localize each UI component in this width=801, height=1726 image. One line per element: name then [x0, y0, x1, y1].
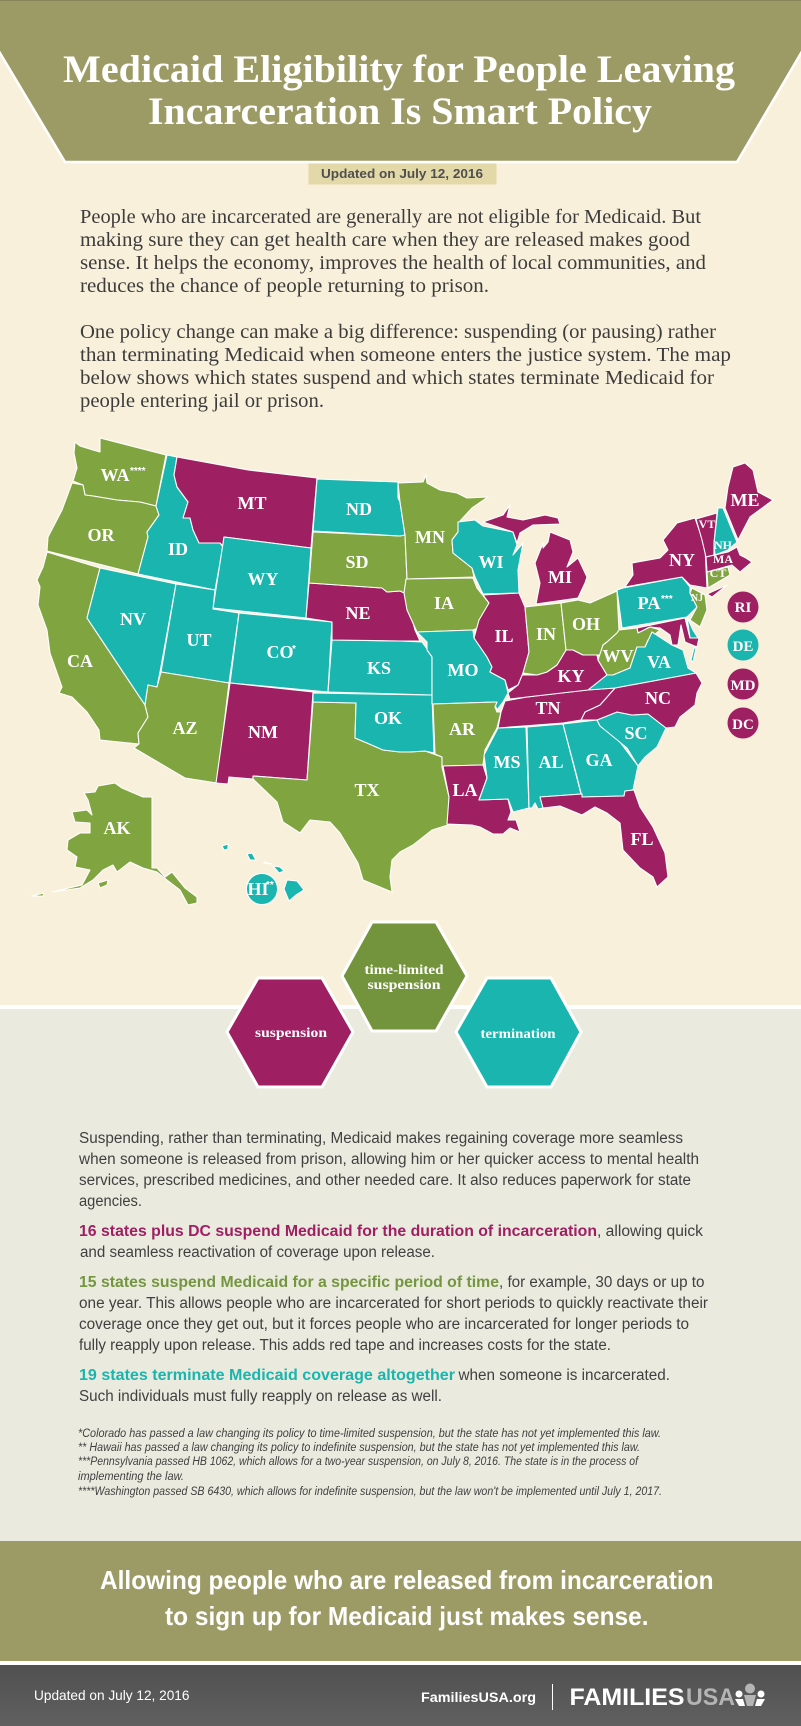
state: PA: *** [661, 594, 673, 605]
state: NE: NE [345, 603, 371, 623]
footnotes: implementing the law. [78, 1471, 184, 1483]
small-state circle: MD [728, 668, 758, 700]
state: MO: MO [448, 660, 478, 680]
state: GA [563, 720, 638, 797]
state: LA: LA [452, 780, 478, 800]
state: IN [523, 603, 566, 675]
state: IA: IA [434, 593, 454, 613]
Families USA logo: FAMILIES [570, 1684, 684, 1711]
finding: states that suspend: and seamless reactivation of coverage upon release. [80, 1244, 435, 1261]
finding: states that suspend [79, 1223, 703, 1261]
state: CT: CT [710, 566, 726, 580]
state: AZ: AZ [172, 718, 198, 738]
title: Medicaid Eligibility for People Leaving [63, 48, 736, 91]
intro paragraph 2: than terminating Medicaid when someone enters the justice system. The map [80, 345, 731, 366]
state: MS [479, 727, 529, 812]
page background: cream upper section [0, 0, 801, 1007]
state: NM [216, 683, 313, 784]
state: NJ [690, 588, 707, 627]
title [63, 48, 736, 133]
footnotes: *Colorado has passed a law changing its policy to time-limited suspension, but the state has not yet implemented this law. [78, 1428, 661, 1440]
state: KY [508, 650, 607, 699]
finding: time-limited suspension: , for example, 30 days or up to [499, 1274, 704, 1291]
state: IL: IL [494, 626, 514, 646]
state: MO [417, 630, 508, 710]
state: VT: VT [699, 517, 715, 531]
legend hexagon: time-limited suspension: time-limited [364, 963, 444, 978]
state: PA: PA [638, 593, 660, 613]
state: WY [213, 537, 311, 618]
state: SD [309, 532, 407, 593]
small-state circle: DE: DE [733, 639, 753, 655]
header banner with title [0, 0, 801, 162]
state: SC: SC [624, 723, 648, 743]
explanatory paragraph: agencies. [79, 1193, 142, 1210]
state: OH [561, 591, 619, 655]
small-state circle: DC: DC [732, 717, 754, 733]
state: WY: WY [248, 569, 278, 589]
intro paragraph 1: sense. It helps the economy, improves the health of local communities, and [80, 253, 706, 274]
small-state circle: MD: MD [730, 678, 756, 694]
state: AK: AK [104, 818, 130, 838]
state: AK [32, 783, 197, 905]
small-state circle: RI: RI [735, 600, 751, 616]
page background: grey lower section [0, 1005, 801, 1545]
state: WA: **** [130, 466, 146, 477]
state: GA: GA [586, 750, 613, 770]
state: NY [625, 518, 727, 597]
footnotes: ***Pennsylvania passed HB 1062, which allows for a two-year suspension, on July 8, 2016. The state is in the process of [78, 1456, 640, 1468]
state: ID: ID [168, 539, 188, 559]
legend hexagon: suspension [227, 978, 353, 1087]
state: AL [527, 724, 581, 809]
finding: time-limited suspension: 15 states suspend Medicaid for a specific period of time [79, 1274, 499, 1291]
state: WV: WV [602, 646, 634, 666]
state: SC [597, 712, 666, 766]
intro paragraph 2 [80, 322, 731, 412]
explanatory paragraph [78, 1130, 699, 1210]
state: ID [138, 455, 223, 590]
explanatory paragraph: Suspending, rather than terminating, Medicaid makes regaining coverage more seamless [79, 1130, 683, 1147]
state: MA and RI [706, 547, 752, 572]
legend hexagon: time-limited suspension: suspension [368, 978, 441, 993]
legend hexagon: time-limited suspension [342, 922, 467, 1031]
explanatory paragraph: when someone is released from prison, allowing him or her quicker access to mental health [78, 1151, 699, 1168]
finding: states that suspend: 16 states plus DC suspend Medicaid for the duration of incarceration [79, 1223, 597, 1240]
footer bar [0, 1665, 801, 1726]
state: MT: MT [238, 493, 266, 513]
state: WA: WA [100, 465, 130, 485]
conclusion band: Allowing people who are released from incarceration [100, 1565, 714, 1595]
state: MI [483, 505, 587, 604]
state: TX [253, 702, 449, 892]
finding: states that terminate [79, 1367, 670, 1405]
finding: states that terminate: when someone is incarcerated. [458, 1367, 670, 1384]
state: WV [598, 627, 660, 675]
state: AR: AR [449, 719, 476, 739]
intro paragraph 1: People who are incarcerated are generally are not eligible for Medicaid. But [80, 207, 702, 228]
state: CA: CA [67, 651, 93, 671]
legend hexagon: termination [456, 978, 581, 1087]
state: WI [452, 520, 523, 594]
state: PA [617, 577, 697, 628]
footnotes: ****Washington passed SB 6430, which allows for indefinite suspension, but the law won't be implemented until July 1, 2017. [78, 1486, 662, 1498]
state: NY: NY [669, 550, 695, 570]
state: AR [433, 702, 501, 766]
intro paragraph 1: making sure they can get health care when they are released makes good [80, 230, 690, 251]
finding: states that suspend: , allowing quick [597, 1223, 703, 1240]
small-state circle: RI [728, 592, 758, 622]
conclusion band: to sign up for Medicaid just makes sense. [165, 1601, 648, 1631]
state: ND [313, 479, 405, 536]
state: NC [581, 673, 702, 728]
finding: time-limited suspension: fully reapply upon release. This adds red tape and increases costs for the state. [79, 1337, 611, 1354]
state: AZ [134, 672, 229, 783]
footer date: Updated on July 12, 2016 [34, 1687, 190, 1703]
state: TX: TX [354, 780, 380, 800]
state: NE [306, 583, 420, 641]
state: SD: SD [345, 552, 369, 572]
Families USA logo [570, 1684, 765, 1711]
state: CT [707, 566, 730, 588]
footnotes [78, 1428, 662, 1498]
state: NM: NM [248, 722, 278, 742]
legend hexagon: termination: termination [480, 1027, 556, 1042]
intro paragraph 2: below shows which states suspend and which states terminate Medicaid for [80, 368, 715, 389]
conclusion band [0, 1541, 801, 1665]
title: Incarceration Is Smart Policy [148, 90, 653, 133]
state: MS: MS [494, 752, 520, 772]
Families USA logo: USA [686, 1684, 735, 1711]
finding: time-limited suspension [79, 1274, 708, 1354]
state: OR [47, 483, 159, 574]
finding: time-limited suspension: coverage once they get out, but it forces people who are incarcerated for longer periods to [79, 1316, 689, 1333]
state: CO: * [292, 644, 296, 655]
explanatory paragraph: services, prescribed medicines, and other needed care. It also reduces paperwork for state [79, 1172, 691, 1189]
state: IL [474, 593, 529, 690]
state: FL: FL [630, 829, 654, 849]
finding: states that terminate: Such individuals must fully reapply on release as well. [79, 1388, 442, 1405]
intro paragraph 1 [80, 207, 706, 297]
state: NC: NC [645, 688, 671, 708]
intro paragraph 1: reduces the chance of people returning to prison. [80, 276, 489, 297]
state: MN: MN [415, 527, 445, 547]
state: FL [540, 790, 668, 887]
updated date badge [308, 164, 496, 184]
state: HI: HI [247, 879, 269, 899]
state: KS: KS [367, 658, 391, 678]
state: KY: KY [558, 666, 585, 686]
legend hexagon: suspension: suspension [255, 1026, 327, 1041]
state: ME [725, 463, 773, 540]
state: IN: IN [536, 624, 556, 644]
footnotes: ** Hawaii has passed a law changing its policy to indefinite suspension, but the state has not yet implemented this law. [78, 1442, 640, 1454]
state: NJ: NJ [691, 593, 703, 604]
state: NH: NH [714, 538, 733, 552]
state: UT [161, 584, 239, 683]
state: CO: CO [266, 642, 294, 662]
state: TN [498, 688, 615, 728]
finding: states that terminate: 19 states terminate Medicaid coverage altogether [79, 1367, 455, 1384]
state: MI: MI [548, 567, 572, 587]
state: IA [404, 578, 489, 632]
state: LA [443, 765, 520, 834]
state: MD [637, 618, 699, 647]
state: WI: WI [478, 552, 504, 572]
state: MT [174, 457, 317, 548]
intro paragraph 2: One policy change can make a big difference: suspending (or pausing) rather [80, 322, 717, 343]
state: OH: OH [572, 614, 600, 634]
state: TN: TN [535, 698, 561, 718]
state: UT: UT [186, 630, 212, 650]
state: VA [588, 632, 696, 690]
state: HI: ** [266, 880, 274, 891]
state: OK: OK [374, 708, 402, 728]
state: NH [714, 508, 737, 555]
state: KS [328, 640, 432, 695]
state: CO [230, 613, 332, 692]
state: ME: ME [730, 490, 760, 510]
intro paragraph 2: people entering jail or prison. [80, 391, 324, 412]
state: ND: ND [346, 499, 372, 519]
state: MA and RI: MA [713, 552, 733, 566]
state: OR: OR [88, 525, 116, 545]
state: CA [37, 552, 148, 744]
footer url: FamiliesUSA.org [421, 1689, 536, 1705]
small-state circle: DC [728, 708, 758, 738]
state: AL: AL [538, 752, 564, 772]
state: NV: NV [120, 609, 146, 629]
state: HI [222, 844, 304, 904]
updated date badge: Updated on July 12, 2016 [321, 166, 483, 181]
state: NV [87, 568, 176, 705]
state: WA [73, 438, 166, 506]
state: VA: VA [647, 652, 671, 672]
state: OK [313, 693, 434, 753]
US map [32, 438, 773, 905]
finding: time-limited suspension: one year. This allows people who are incarcerated for short periods to quickly reactivate their [79, 1295, 708, 1312]
state: VT [696, 513, 717, 557]
state: MN [398, 475, 488, 579]
small-state circle: DE [728, 630, 758, 660]
state: DE [687, 617, 698, 638]
